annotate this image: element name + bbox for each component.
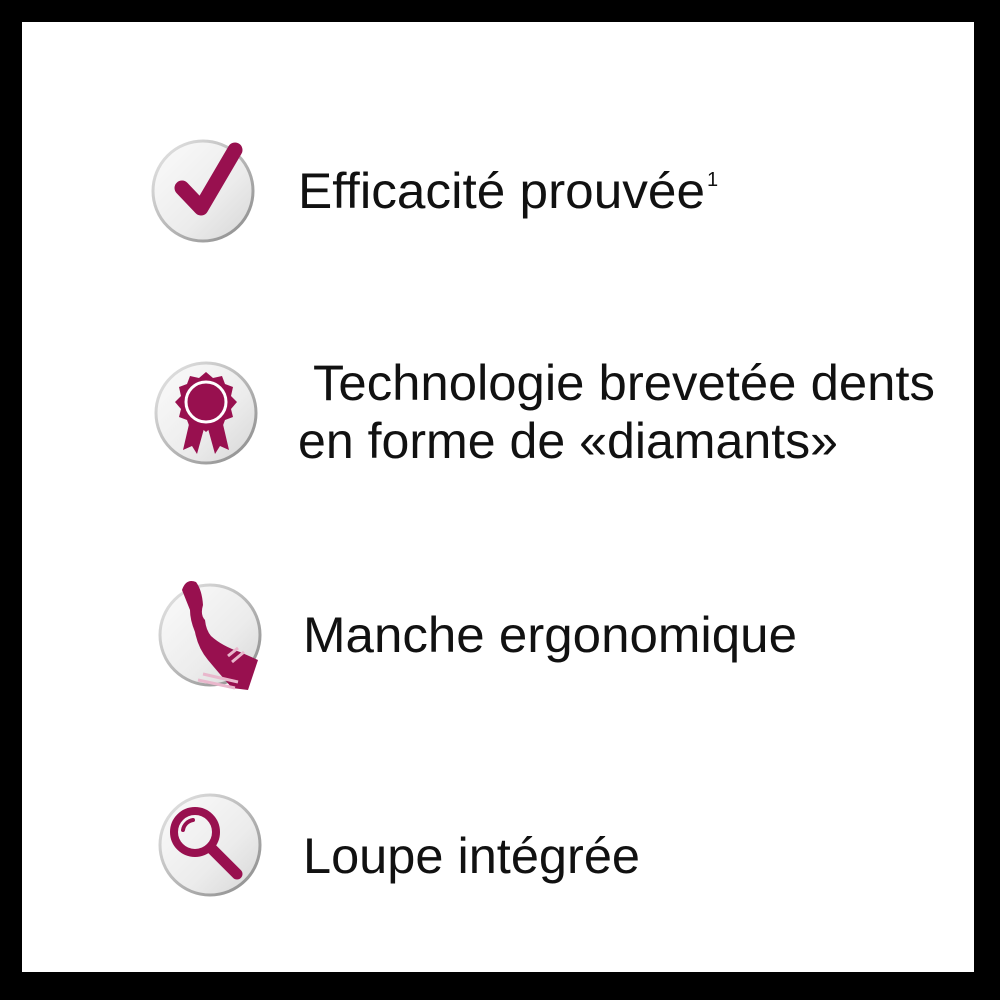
icon: award rosette (156, 363, 256, 463)
text: manche: Manche ergonomique (303, 607, 797, 663)
icon: magnifier (160, 795, 260, 895)
text: loupe: Loupe intégrée (303, 828, 640, 884)
text: efficacité: 1 (707, 169, 718, 191)
text: efficacité: Efficacité prouvée (298, 163, 705, 219)
text: technologie (298, 355, 935, 469)
text: technologie: Technologie brevetée dents (313, 355, 935, 411)
text: technologie: en forme de «diamants» (298, 413, 838, 469)
icon: brush handle (160, 581, 260, 690)
icon: check (153, 141, 253, 241)
